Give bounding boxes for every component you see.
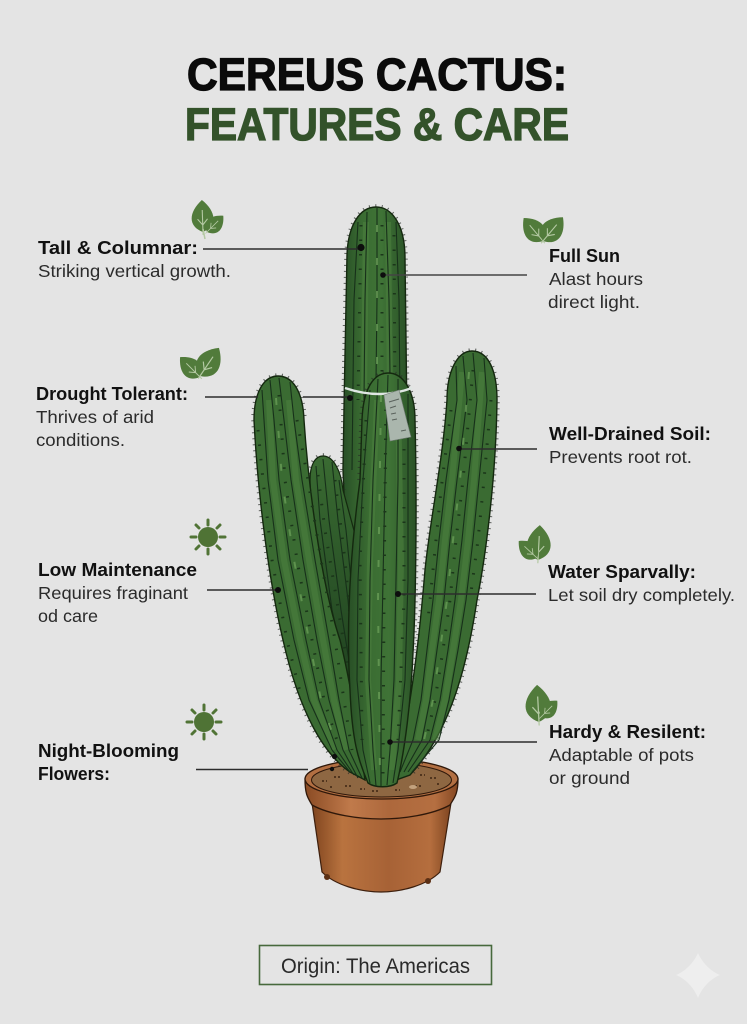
label text: Striking vertical growth. <box>38 261 231 281</box>
callout: Hardy & Resilent <box>387 684 706 788</box>
label text: Let soil dry completely. <box>548 585 735 605</box>
callout: Low Maintenance <box>38 520 281 626</box>
title: CEREUS CACTUS: <box>187 49 567 100</box>
label heading: Hardy & Resilent: <box>549 722 706 742</box>
label text: Alast hours <box>549 269 643 289</box>
label heading: Well-Drained Soil: <box>549 424 711 444</box>
leader line <box>207 587 281 593</box>
leader line <box>380 272 527 278</box>
icon: leaves <box>191 200 229 239</box>
callout: Night-Blooming Flowers <box>38 705 337 784</box>
leader line <box>387 739 537 745</box>
leader line <box>205 395 353 401</box>
stem: small rear <box>310 456 362 695</box>
icon: sun <box>187 705 221 739</box>
label text: Prevents root rot. <box>549 447 692 467</box>
title: FEATURES & CARE <box>185 99 569 150</box>
callout: Full Sun: direct light. <box>548 292 640 312</box>
stem: right <box>396 351 497 780</box>
label heading: Night-Blooming <box>38 741 179 761</box>
leader line <box>456 446 537 451</box>
icon: leaves <box>516 210 571 248</box>
terracotta pot <box>305 759 458 892</box>
callout: Low Maintenance: od care <box>38 606 98 626</box>
origin box: Origin: The Americas <box>281 955 470 978</box>
callout: Full Sun <box>380 210 643 312</box>
label text: Adaptable of pots <box>549 745 694 765</box>
callout: Night-Blooming Flowers: Flowers: <box>38 764 110 784</box>
callout: Water Sparvally <box>395 525 735 605</box>
icon: leaves <box>173 341 229 384</box>
label heading: Full Sun <box>549 246 620 266</box>
label text: Thrives of arid <box>36 407 154 427</box>
label heading: Drought Tolerant: <box>36 384 188 404</box>
leader line <box>203 244 365 251</box>
callout: Drought Tolerant <box>36 341 353 450</box>
potted cactus illustration <box>254 207 497 892</box>
stem: tall centre <box>343 207 407 640</box>
icon: leaves <box>513 525 552 564</box>
title <box>185 49 569 150</box>
label heading: Tall & Columnar: <box>38 238 198 258</box>
plant tag <box>345 388 412 441</box>
callout: Drought Tolerant: conditions. <box>36 430 125 450</box>
stem: front <box>349 373 416 787</box>
callout: Well-Drained Soil <box>456 424 711 467</box>
callout: Hardy & Resilent: or ground <box>549 768 630 788</box>
icon: sun <box>191 520 225 554</box>
label heading: Low Maintenance <box>38 560 197 580</box>
leader line <box>395 591 536 597</box>
label heading: Water Sparvally: <box>548 562 696 582</box>
label text: Requires fraginant <box>38 583 188 603</box>
origin box <box>260 946 492 984</box>
icon: leaves <box>524 684 563 726</box>
callout: Tall & Columnar <box>38 200 365 281</box>
icon: sparkle watermark <box>676 953 720 998</box>
leader line <box>196 754 337 771</box>
stem: left <box>254 376 365 780</box>
